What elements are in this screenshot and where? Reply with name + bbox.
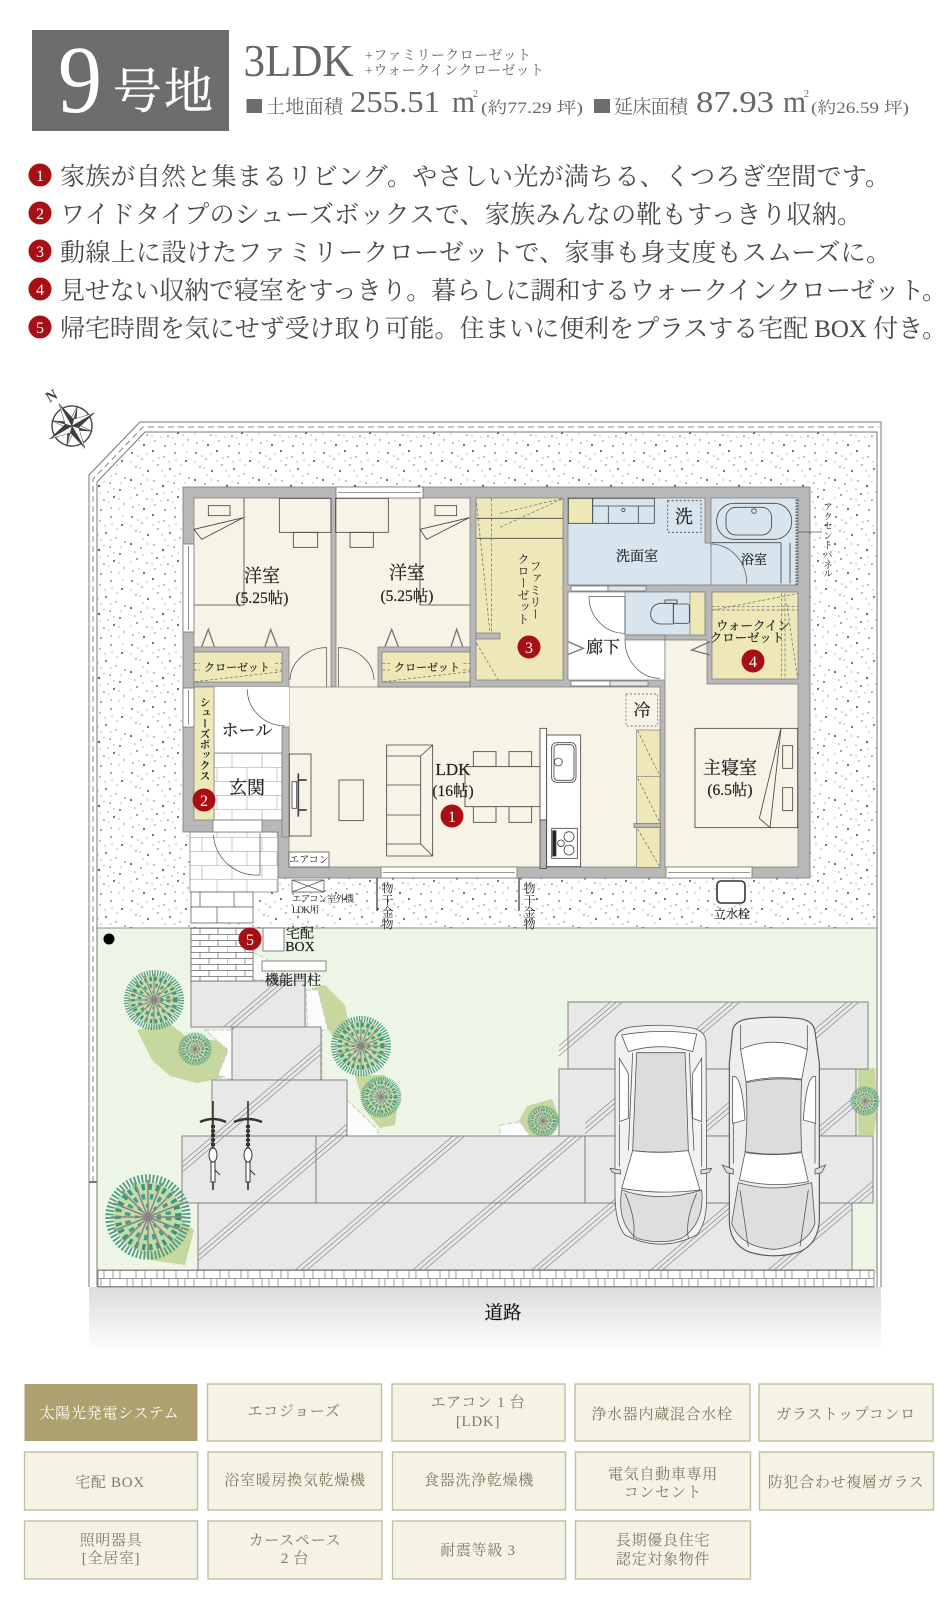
- furniture dining and kitchen: [465, 728, 661, 868]
- accent panel leader: [798, 531, 822, 533]
- card: dishwasher: 食器洗浄乾燥機: [424, 1471, 534, 1489]
- card: car space: [208, 1521, 382, 1579]
- cars: [610, 1017, 826, 1256]
- card: eco jaws: エコジョーズ: [247, 1403, 341, 1420]
- feature 3: 3: [36, 244, 44, 261]
- room labels: 廊下: [586, 638, 620, 657]
- hall wall: [282, 727, 289, 837]
- TV stand and rug: [289, 754, 363, 836]
- room labels: 宅配: [286, 925, 314, 942]
- entrance paving: [190, 832, 278, 981]
- kitchen shelves: [634, 730, 661, 867]
- card: lighting: [全居室]: [82, 1549, 140, 1567]
- building walls: [183, 487, 810, 878]
- area figures: 土地面積: [266, 96, 345, 118]
- rooms: [194, 498, 798, 867]
- card: bath dryer: 浴室暖房換気乾燥機: [224, 1471, 366, 1489]
- area figures: 2: [473, 89, 478, 100]
- vertical labels: [198, 502, 833, 931]
- road shading: [89, 1287, 881, 1353]
- card: faucet: 浄水器内蔵混合水栓: [591, 1405, 733, 1423]
- room labels: 洗: [675, 507, 693, 527]
- room labels: クローゼット: [394, 661, 460, 674]
- card: eco jaws: [208, 1384, 382, 1441]
- room labels: BOX: [285, 940, 315, 955]
- feature 4: 4: [36, 282, 44, 299]
- title badge: 9号地: 9: [58, 26, 102, 133]
- card: car space: 2 台: [281, 1550, 309, 1567]
- marker 5: [238, 928, 262, 950]
- room: bathroom: [711, 498, 798, 585]
- card: aircon: [LDK]: [456, 1414, 500, 1430]
- driveway slabs: [182, 981, 873, 1270]
- room: master bedroom: [665, 640, 798, 867]
- room labels: ウォークイン: [716, 619, 790, 633]
- marker 2: 2: [200, 793, 208, 810]
- room: hall: [214, 687, 289, 753]
- beds and desks: [194, 498, 470, 605]
- card: aircon: [392, 1384, 565, 1441]
- heading: layout type: +ファミリークローゼット: [365, 48, 531, 64]
- room: corridor: [568, 592, 665, 680]
- card: long-life housing: 長期優良住宅: [616, 1532, 710, 1549]
- card: long-life housing: [576, 1521, 750, 1579]
- marker 1: 1: [448, 809, 456, 826]
- heading: layout type: [244, 35, 544, 86]
- feature 3: 動線上に設けたファミリークローゼットで、家事も身支度もスムーズに。: [60, 239, 891, 267]
- faucet: [717, 881, 745, 903]
- gravel ground: [97, 432, 877, 928]
- card: lighting: 照明器具: [80, 1532, 143, 1549]
- room: closet left: [194, 647, 289, 687]
- car right: [722, 1017, 826, 1256]
- doors: [589, 544, 747, 678]
- card: glass top: [759, 1384, 933, 1441]
- card: solar: [24, 1384, 198, 1441]
- feature list: [28, 163, 947, 343]
- dining table: [465, 752, 540, 822]
- card: aircon: エアコン 1 台: [431, 1394, 525, 1411]
- site boundary fence: [89, 422, 881, 1287]
- equipment grid: [24, 1384, 934, 1579]
- marker 5: 5: [246, 932, 254, 949]
- windows: [183, 487, 752, 878]
- feature 5: 5: [36, 320, 44, 337]
- closet dashes: [194, 498, 498, 682]
- furniture left wing: [194, 498, 498, 875]
- room labels: 玄関: [229, 778, 265, 798]
- card: faucet: [575, 1384, 750, 1441]
- card: long-life housing: 認定対象物件: [616, 1550, 710, 1568]
- marker 4: 4: [749, 654, 757, 671]
- card: security glass: 防犯合わせ複層ガラス: [768, 1473, 924, 1491]
- road edge bricks: [98, 1270, 874, 1287]
- room labels: [204, 507, 790, 989]
- area figures: 87.93: [696, 84, 774, 119]
- card: delivery: [24, 1452, 198, 1510]
- card: seismic: 耐震等級 3: [440, 1542, 516, 1559]
- marker 1: [440, 804, 464, 828]
- sofa: [387, 745, 433, 856]
- area figures: 延床面積: [614, 96, 690, 118]
- room labels: クローゼット: [204, 661, 270, 674]
- card: EV outlet: [576, 1452, 750, 1510]
- room labels: 洋室: [389, 563, 425, 583]
- room labels: 立水栓: [714, 906, 750, 921]
- fridge space: [626, 694, 657, 726]
- area figures: (約26.59 坪): [811, 99, 909, 117]
- site plan: [89, 422, 890, 1353]
- card: security glass: [760, 1452, 934, 1510]
- area figures: 2: [804, 89, 809, 100]
- room: walk-in closet: [712, 592, 798, 679]
- card: EV outlet: コンセント: [624, 1485, 702, 1501]
- room labels: 主寝室: [703, 758, 757, 778]
- card: seismic: [392, 1521, 566, 1579]
- bicycle left: [200, 1101, 226, 1190]
- feature 2: 2: [36, 206, 44, 223]
- feature 4: 見せない収納で寝室をすっきり。暮らしに調和するウォークインクローゼット。: [60, 277, 947, 305]
- feature 1: 1: [36, 168, 44, 185]
- room labels: 機能門柱: [265, 972, 321, 989]
- washstand: [568, 498, 701, 532]
- driveway stripes: [182, 982, 872, 1270]
- room labels: (5.25帖): [236, 589, 288, 607]
- toilet: [651, 600, 689, 624]
- card: dishwasher: [392, 1452, 566, 1510]
- room: family closet: [476, 498, 563, 680]
- exterior equipment: [104, 532, 822, 971]
- feature 1: 家族が自然と集まるリビング。やさしい光が満ちる、くつろぎ空間です。: [60, 163, 890, 191]
- aircon caption: [292, 893, 354, 916]
- room: western room left: [194, 498, 331, 688]
- title badge: 9号地: [32, 26, 229, 133]
- room: entrance: [214, 753, 282, 820]
- marker 3: [518, 636, 540, 658]
- aircon caption: エアコン室外機: [292, 893, 354, 905]
- bicycles: [200, 1101, 262, 1190]
- garden lawn: [97, 928, 877, 1273]
- room labels: 冷: [634, 701, 650, 720]
- room: western room right: [336, 498, 470, 688]
- area figures: (約77.29 坪): [481, 99, 583, 117]
- marker 3: 3: [525, 640, 533, 657]
- bicycle right: [234, 1101, 262, 1190]
- marker 4: [742, 650, 764, 672]
- trees: [110, 973, 878, 1256]
- room labels: 洋室: [244, 566, 280, 586]
- room labels: クローゼット: [710, 631, 784, 645]
- icon: compass: [36, 387, 108, 462]
- area figures: m: [783, 84, 806, 119]
- closet dashes: [500, 498, 798, 679]
- room: closet right: [378, 647, 470, 687]
- garden shrubs: [121, 985, 877, 1265]
- room labels: 浴室: [741, 552, 767, 567]
- aircon indoor unit: エアコン: [289, 855, 329, 866]
- card: solar: 太陽光発電システム: [40, 1405, 179, 1422]
- vertical labels: 物干金物: [380, 881, 394, 931]
- vertical labels: ファミリー: [528, 560, 542, 620]
- room labels: LDK: [436, 760, 471, 779]
- laundry rails: [377, 878, 519, 911]
- feature 5: 帰宅時間を気にせず受け取り可能。住まいに便利をプラスする宅配 BOX 付き。: [60, 315, 947, 343]
- heading: layout type: 3LDK: [244, 35, 354, 86]
- fold marks: [568, 642, 710, 655]
- black dot marker: [104, 934, 114, 944]
- feature 2: ワイドタイプのシューズボックスで、家族みんなの靴もすっきり収納。: [60, 201, 862, 229]
- area figures: m: [452, 84, 475, 119]
- gate post: [262, 961, 326, 971]
- room: LDK floor: [289, 687, 660, 867]
- card: car space: カースペース: [249, 1533, 341, 1549]
- road label: 道路: [484, 1303, 522, 1324]
- room labels: (5.25帖): [381, 587, 433, 605]
- card: EV outlet: 電気自動車専用: [608, 1465, 718, 1483]
- heading: layout type: +ウォークインクローゼット: [365, 63, 544, 79]
- marker 2: [192, 788, 216, 812]
- master bed: [695, 728, 798, 828]
- doors: [213, 648, 374, 875]
- vertical labels: 物干金物: [522, 881, 536, 931]
- vertical labels: クローゼット: [516, 553, 530, 625]
- kitchen counter: [540, 728, 581, 868]
- aircon caption: LDK用: [292, 905, 319, 916]
- vertical labels: シューズボックス: [198, 697, 210, 781]
- room labels: (16帖): [432, 782, 474, 800]
- card: glass top: ガラストップコンロ: [776, 1406, 916, 1423]
- room labels: (6.5帖): [707, 781, 753, 799]
- area figures: [246, 84, 909, 119]
- car left: [610, 1025, 712, 1244]
- closet fold doors: [202, 629, 463, 647]
- card: bath dryer: [208, 1452, 382, 1510]
- delivery box: [263, 928, 284, 951]
- vertical labels: アクセントパネル: [821, 502, 833, 578]
- room: toilet: [625, 592, 705, 640]
- room labels: 洗面室: [616, 548, 658, 565]
- title badge: 9号地: 号地: [113, 64, 213, 119]
- room labels: ホール: [222, 721, 272, 740]
- card: lighting: [24, 1521, 198, 1579]
- outdoor aircon unit: [292, 880, 324, 892]
- icon: compass: N: [43, 387, 61, 406]
- room: shoe box: [194, 687, 214, 820]
- card: delivery: 宅配 BOX: [75, 1474, 145, 1491]
- cobble path: [205, 952, 530, 1136]
- plan markers: [192, 636, 764, 950]
- area figures: 255.51: [350, 84, 440, 119]
- furniture right wing: [477, 498, 798, 828]
- bathtub: [712, 499, 797, 585]
- room: washroom: [568, 498, 711, 585]
